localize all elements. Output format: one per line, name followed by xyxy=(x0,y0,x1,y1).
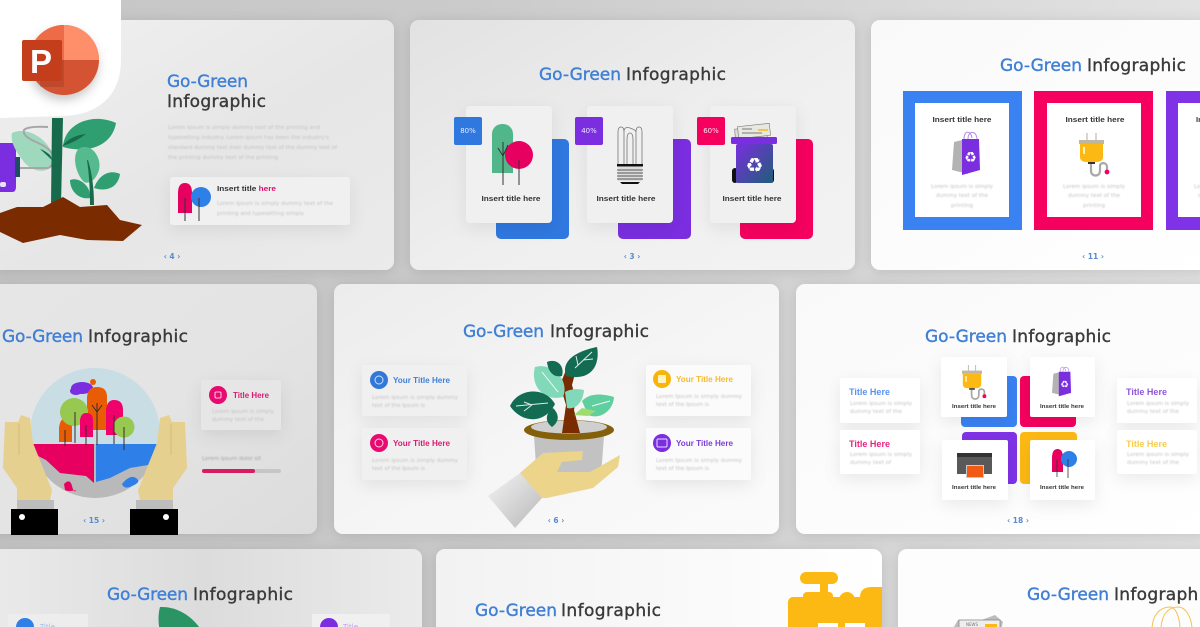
title: bottom left: Infographic xyxy=(193,585,293,605)
card: blue title: Your Title Here xyxy=(393,376,451,385)
card: yellow title: Lorem Ipsum is simply dummy xyxy=(656,394,743,400)
card: title here: Lorem ipsum is simply xyxy=(212,409,275,415)
frame: purple xyxy=(1166,91,1200,230)
title: slide 4: Go-Green xyxy=(167,72,248,92)
card: purple title: text of the Ipsum is xyxy=(656,466,709,472)
frame: blue: dummy text of the xyxy=(936,193,989,199)
card: title yellow: Lorem ipsum is simply xyxy=(1127,452,1190,458)
card: title yellow xyxy=(1117,430,1197,474)
illustration: plant with soil and plug xyxy=(0,118,142,243)
card: title pink: dummy text of xyxy=(850,460,892,466)
icon: shopping bag xyxy=(952,132,980,175)
card: purple title: Lorem Ipsum is simply dummy xyxy=(656,458,743,464)
frame: blue: printing xyxy=(951,203,973,209)
frame: pink: Insert title here xyxy=(1066,115,1124,124)
card: yellow title: text of the Ipsum is xyxy=(656,402,709,408)
icon: light bulb xyxy=(617,127,643,184)
card: pink title: Your Title Here xyxy=(393,439,451,448)
cross shapes xyxy=(961,376,1077,484)
card: insert title here xyxy=(170,177,350,225)
panel: slide bottom center xyxy=(436,549,882,627)
panel: slide bottom left xyxy=(0,549,422,627)
title: slide 11 xyxy=(1000,56,1186,76)
title: slide 15: Infographic xyxy=(88,327,188,347)
title: bottom center: Infographic xyxy=(561,601,661,621)
panel: slide 15 globe xyxy=(0,284,317,535)
card: purple 40% xyxy=(575,106,691,239)
card: bag xyxy=(1030,357,1095,417)
title: slide 15: Go-Green xyxy=(2,327,83,347)
progress bar: Lorem ipsum dolor sit xyxy=(202,456,262,462)
card: bag: Insert title here xyxy=(1040,404,1085,410)
title: slide 6: Go-Green xyxy=(463,322,544,342)
card: printer: Insert title here xyxy=(952,485,997,491)
title: slide 3 xyxy=(539,65,726,85)
card: pink title: text of the Ipsum is xyxy=(372,466,425,472)
frame: blue: Lorem ipsum is simply xyxy=(931,184,994,190)
card: blue partial xyxy=(8,614,88,627)
icon: green leaf partial xyxy=(158,607,201,627)
card: pink title: Lorem Ipsum is simply dummy xyxy=(372,458,459,464)
card: pink title xyxy=(362,428,467,480)
card: blue 80%: 80% xyxy=(460,127,476,135)
title: slide 4 xyxy=(167,72,266,112)
card: title blue: dummy text of the xyxy=(850,409,903,415)
icon: trees xyxy=(178,183,211,221)
icon: PowerPoint logo: P xyxy=(30,43,52,80)
card: blue title: Lorem Ipsum is simply dummy xyxy=(372,395,459,401)
title: bottom left: Go-Green xyxy=(107,585,188,605)
icon: yellow loops xyxy=(1152,607,1192,627)
card: pink 60% xyxy=(697,106,813,239)
card: blue 80% xyxy=(454,106,569,239)
card: pink 60%: 60% xyxy=(703,127,719,135)
right hand xyxy=(130,415,187,535)
card: yellow title xyxy=(646,365,751,416)
left hand xyxy=(3,415,58,535)
frame: pink xyxy=(1034,91,1153,230)
title: slide 18: Infographic xyxy=(1012,327,1111,347)
icon: trees xyxy=(492,124,533,185)
title: bottom right xyxy=(1027,585,1200,605)
card: title purple xyxy=(1117,378,1197,423)
card: plug: Insert title here xyxy=(952,404,997,410)
card: purple 40%: Insert title here xyxy=(596,194,656,203)
text block: slide 4 description: typesetting industry. Lorem Ipsum has been the industry's xyxy=(168,135,329,141)
card: title purple: dummy text of the xyxy=(1127,409,1180,415)
title: slide 6: Infographic xyxy=(550,322,649,342)
page number 18: ‹ 18 › xyxy=(1007,516,1029,525)
title: bottom right: Go-Green xyxy=(1027,585,1109,605)
title: slide 11: Go-Green xyxy=(1000,56,1082,76)
text block: slide 4 description: standard dummy text ever dummy text of the dummy text of xyxy=(168,145,338,151)
text block: slide 4 description xyxy=(168,125,338,161)
card: title pink: Title Here xyxy=(849,439,890,449)
page number 3: ‹ 3 › xyxy=(624,252,640,261)
title: slide 3: Go-Green xyxy=(539,65,621,85)
panel: slide 6 potted plant xyxy=(334,284,779,534)
card: blue title: text of the Ipsum is xyxy=(372,403,425,409)
card: purple 40%: 40% xyxy=(581,127,597,135)
card: title pink xyxy=(840,430,920,474)
card: purple partial xyxy=(312,614,390,627)
card: trees: Insert title here xyxy=(1040,485,1085,491)
title: slide 11: Infographic xyxy=(1087,56,1186,76)
illustration: globe with trees held in hands xyxy=(3,368,187,535)
card: yellow title: Your Title Here xyxy=(676,375,734,384)
icon: newspaper xyxy=(952,615,1003,627)
card: plug xyxy=(941,357,1007,417)
icon: recycling bin: ♻ xyxy=(746,153,763,177)
card: title here xyxy=(201,380,281,430)
title: slide 15 xyxy=(2,327,188,347)
card: title blue: Lorem ipsum is simply xyxy=(850,401,913,407)
card: title yellow: dummy text of the xyxy=(1127,460,1180,466)
card: insert title here: Lorem Ipsum is simply dummy text of the xyxy=(217,201,334,207)
title: bottom center xyxy=(475,601,661,621)
frame: blue: Insert title here xyxy=(932,115,992,124)
title: slide 18: Go-Green xyxy=(925,327,1007,347)
text block: slide 4 description: Lorem Ipsum is simply dummy text of the printing and xyxy=(168,125,320,131)
card: blue 80%: Insert title here xyxy=(482,194,540,203)
icon: yellow faucet xyxy=(788,572,882,627)
icon: plug xyxy=(1079,133,1109,176)
card: printer xyxy=(942,440,1008,500)
page number 4: ‹ 4 › xyxy=(164,252,180,261)
card: purple title: Your Title Here xyxy=(676,439,734,448)
card: title purple: Title Here xyxy=(1126,387,1167,397)
card: blue title xyxy=(362,365,467,416)
panel: slide 18 cross layout xyxy=(796,284,1200,534)
card: title purple: Lorem ipsum is simply xyxy=(1127,401,1190,407)
hand xyxy=(488,451,620,528)
panel: slide 11 frames xyxy=(871,20,1200,270)
card: title here: dummy text of the xyxy=(212,417,265,423)
frame: blue xyxy=(903,91,1022,230)
card: pink 60%: Insert title here xyxy=(722,194,782,203)
title: slide 18 xyxy=(925,327,1111,347)
frame: pink: printing xyxy=(1083,203,1105,209)
card: title blue: Title Here xyxy=(849,387,890,397)
title: slide 3: Infographic xyxy=(626,65,726,85)
title: bottom left xyxy=(107,585,293,605)
card: title yellow: Title Here xyxy=(1126,439,1167,449)
title: slide 4: Infographic xyxy=(167,92,266,112)
page number 11: ‹ 11 › xyxy=(1082,252,1104,261)
text block: slide 4 description: the printing dummy text of the printing xyxy=(168,155,278,161)
progress bar xyxy=(202,456,281,473)
card: trees xyxy=(1030,440,1095,500)
page number 15: ‹ 15 › xyxy=(83,516,105,525)
page number 6: ‹ 6 › xyxy=(548,516,564,525)
icon: newspaper: NEWS xyxy=(966,622,978,627)
title: slide 6 xyxy=(463,322,649,342)
card: title pink: Lorem ipsum is simply xyxy=(850,452,913,458)
frame: pink: dummy text of the xyxy=(1068,193,1121,199)
panel: slide bottom right xyxy=(898,549,1200,627)
panel: PowerPoint badge xyxy=(0,0,121,118)
card: title here: Title Here xyxy=(233,391,270,400)
panel: slide 4 intro xyxy=(0,20,394,270)
card: insert title here: printing and typesetting simply xyxy=(217,211,305,217)
panel: slide 3 percentages xyxy=(410,20,855,270)
card: insert title here: Insert title here xyxy=(217,184,276,193)
illustration: potted plant in a hand xyxy=(488,347,620,528)
card: purple title xyxy=(646,428,751,480)
card: title blue xyxy=(840,378,920,423)
title: bottom center: Go-Green xyxy=(475,601,557,621)
frame: pink: Lorem ipsum is simply xyxy=(1063,184,1126,190)
